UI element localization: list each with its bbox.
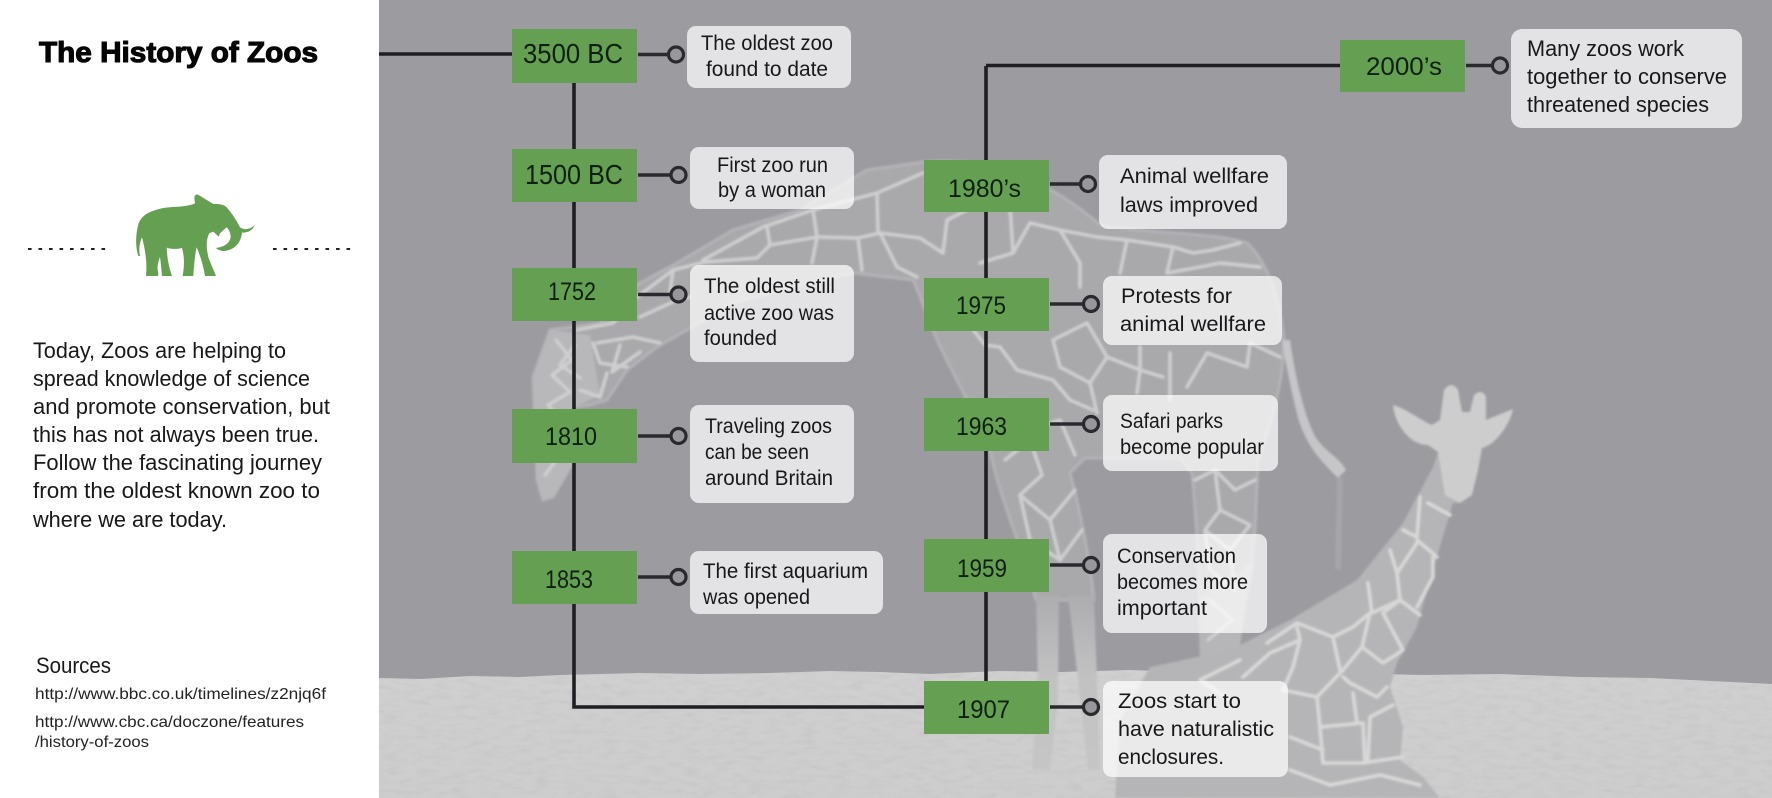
event: 1810: can be seen — [705, 441, 809, 464]
event: 1810: around Britain — [705, 467, 833, 490]
event: 1810 — [512, 405, 854, 503]
event: 1752: founded — [704, 327, 777, 350]
panel: photo background — [379, 0, 1772, 798]
event: 1907: enclosures. — [1118, 746, 1224, 769]
sources — [35, 653, 327, 751]
event: 1963: Safari parks — [1120, 410, 1223, 433]
event: 1963: 1963 — [956, 413, 1007, 441]
event: 1853: was opened — [702, 586, 810, 609]
event: 1975: 1975 — [956, 292, 1006, 320]
intro text: spread knowledge of science — [33, 366, 310, 391]
intro text: this has not always been true. — [33, 422, 319, 447]
panel: left intro column — [0, 0, 379, 798]
event: 2000's: Many zoos work — [1527, 36, 1685, 61]
event: 1975 — [924, 276, 1282, 345]
ground — [379, 670, 1772, 798]
event: 1959: becomes more — [1117, 571, 1248, 594]
event: 1959: important — [1117, 597, 1207, 620]
sources: Sources — [36, 653, 111, 678]
event: 2000's: together to conserve — [1527, 64, 1727, 89]
sources: /history-of-zoos — [35, 734, 149, 751]
event: 1853: The first aquarium — [703, 560, 868, 583]
intro text — [32, 338, 330, 532]
event: 3500 BC: 3500 BC — [523, 38, 623, 69]
event: 1980's: 1980’s — [948, 175, 1021, 203]
event: 2000's: threatened species — [1527, 92, 1709, 117]
event: 3500 BC — [512, 26, 851, 88]
event: 2000's — [1340, 29, 1742, 128]
event: 1752: 1752 — [548, 278, 596, 306]
event: 1500 BC: 1500 BC — [525, 159, 623, 190]
sources: http://www.bbc.co.uk/timelines/z2njq6f — [35, 686, 327, 703]
event: 3500 BC: The oldest zoo — [701, 32, 833, 55]
image: young giraffe lying down — [1115, 385, 1513, 798]
event: 1752: The oldest still — [704, 275, 835, 298]
event: 1752: active zoo was — [704, 302, 834, 325]
event: 2000's: 2000’s — [1366, 53, 1442, 81]
event: 1980's — [924, 155, 1287, 229]
event: 1810: 1810 — [545, 423, 597, 451]
image: standing giraffe — [533, 161, 1346, 770]
event: 1963: become popular — [1120, 436, 1264, 459]
event: 1975: Protests for — [1121, 285, 1232, 308]
event: 1980's: Animal wellfare — [1120, 165, 1269, 188]
intro text: from the oldest known zoo to — [33, 478, 320, 503]
event: 1907: have naturalistic — [1118, 718, 1274, 741]
event: 1500 BC: by a woman — [718, 179, 826, 202]
event: 1980's: laws improved — [1120, 194, 1258, 217]
event: 3500 BC: found to date — [706, 58, 828, 81]
sources: http://www.cbc.ca/doczone/features — [35, 714, 304, 731]
event: 1500 BC — [512, 147, 854, 209]
event: 1963 — [924, 395, 1278, 471]
intro text: Today, Zoos are helping to — [33, 338, 286, 363]
divider dots: right — [273, 248, 351, 250]
event: 1959: 1959 — [957, 555, 1007, 583]
event: 1500 BC: First zoo run — [717, 154, 828, 177]
event: 1810: Traveling zoos — [705, 415, 832, 438]
event: 1752 — [512, 265, 854, 362]
event: 1853 — [512, 551, 883, 614]
event: 1975: animal wellfare — [1120, 313, 1266, 336]
divider dots: left — [28, 248, 106, 250]
intro text: where we are today. — [32, 507, 227, 532]
event: 1907: 1907 — [957, 696, 1010, 724]
event: 1959 — [924, 534, 1267, 633]
event: 1959: Conservation — [1117, 545, 1236, 568]
icon: green elephant — [136, 194, 255, 276]
timeline connector lines — [379, 54, 1340, 707]
event: 1907: Zoos start to — [1118, 690, 1241, 713]
title: The History of Zoos — [39, 37, 318, 69]
intro text: Follow the fascinating journey — [33, 450, 322, 475]
event: 1907 — [924, 681, 1288, 777]
intro text: and promote conservation, but — [33, 394, 330, 419]
event: 1853: 1853 — [545, 566, 593, 594]
